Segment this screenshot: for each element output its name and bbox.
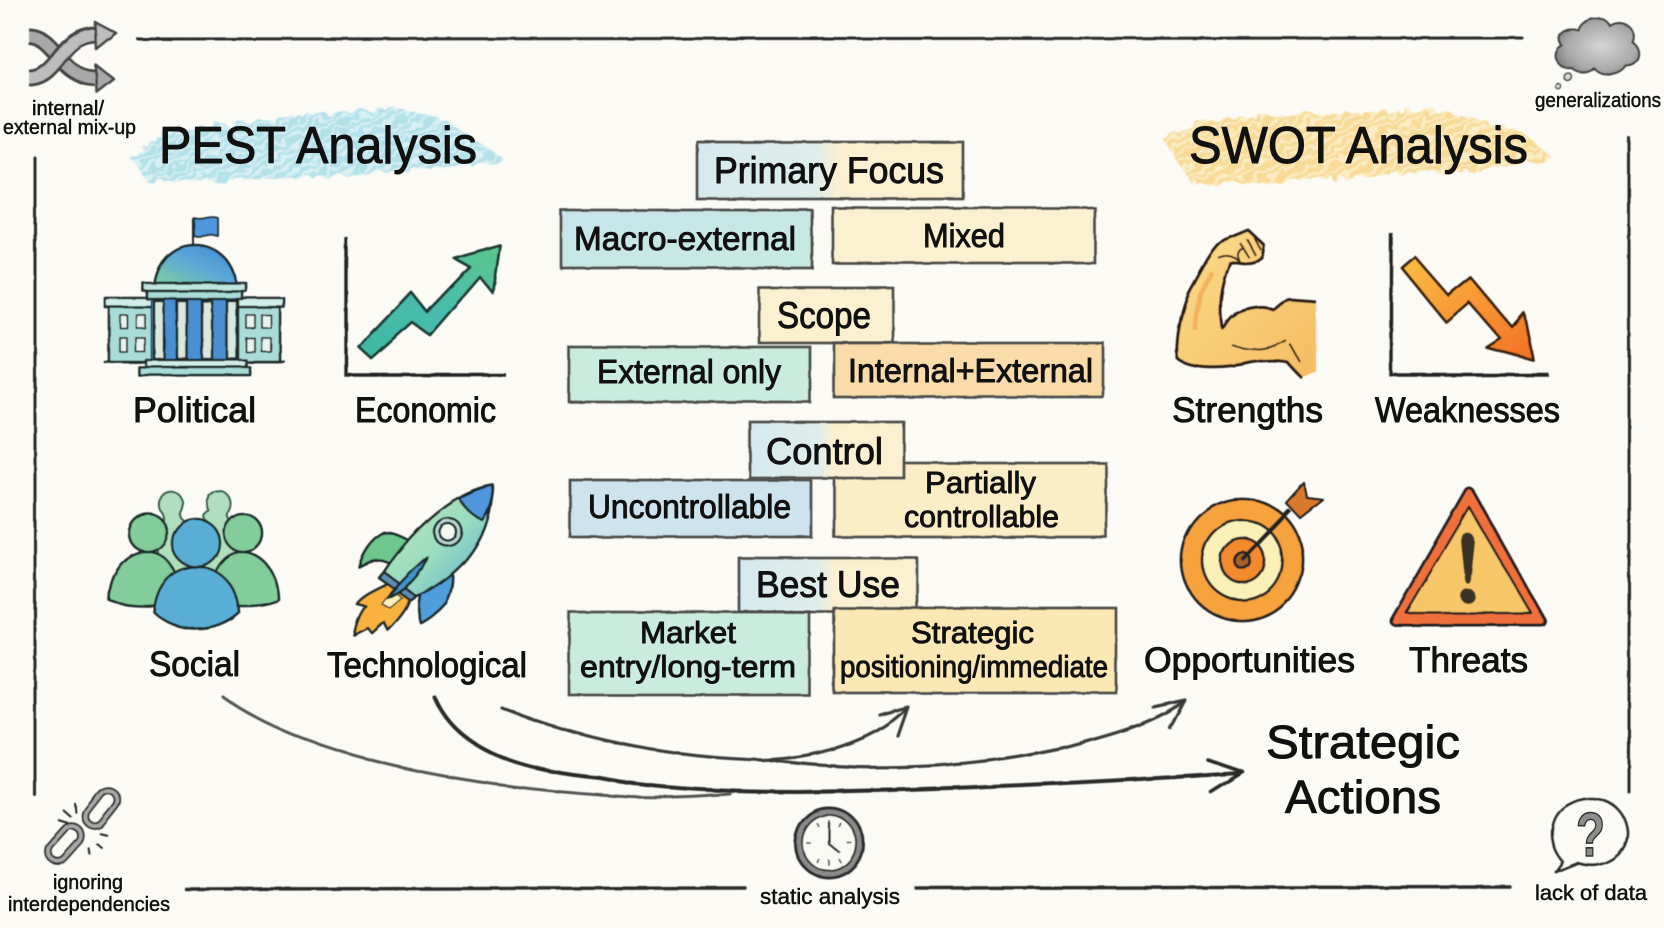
caption: internal/external mix-up: external mix-up (3, 117, 136, 139)
SWOT: Weaknesses (1375, 233, 1560, 430)
label: Strategic Actions: Actions (1285, 771, 1441, 823)
comparison row: Control (570, 422, 1106, 537)
box: Partially controllable: controllable (904, 499, 1059, 534)
caption: lack of data: lack of data (1535, 882, 1647, 905)
caption: static analysis: static analysis (760, 884, 900, 909)
arrow: PEST to Primary Focus boxes (502, 707, 908, 760)
caption: ignoring interdependencies (8, 872, 170, 916)
PEST: Economic (346, 237, 506, 430)
box: Macro-external (561, 210, 812, 268)
label: Weaknesses: Weaknesses (1375, 391, 1560, 430)
heading box: Scope (759, 288, 893, 343)
box: Market entry/long-term: Market (640, 615, 736, 650)
label: Economic: Economic (355, 391, 496, 430)
box: Strategic positioning/immediate (834, 608, 1116, 693)
comparison row: Best Use (569, 558, 1116, 695)
icon: capitol building (105, 217, 284, 375)
box: Strategic positioning/immediate: positioning/immediate (840, 649, 1108, 684)
box: Market entry/long-term (569, 612, 809, 695)
icon: rocket (354, 485, 493, 635)
icon: question bubble, lack of data (1552, 799, 1627, 872)
heading box: Best Use: Best Use (756, 564, 900, 605)
heading box: Primary Focus: Primary Focus (714, 150, 944, 191)
caption: ignoring interdependencies: ignoring (53, 872, 123, 894)
icon: target with arrow (1181, 483, 1323, 621)
heading: PEST Analysis: PEST Analysis (159, 117, 477, 175)
heading box: Scope: Scope (777, 295, 871, 336)
label: Social: Social (149, 645, 240, 684)
heading box: Control (750, 422, 904, 478)
heading box: Control: Control (766, 431, 883, 472)
heading box: Primary Focus (697, 142, 963, 199)
box: Market entry/long-term: entry/long-term (580, 649, 796, 684)
box: Uncontrollable (570, 480, 811, 537)
PEST: Political (105, 217, 284, 430)
icon: broken chain, ignoring interdependencies (44, 787, 121, 865)
arrow: Social to Strategic Actions (223, 697, 730, 797)
icon: clock, static analysis (795, 808, 863, 878)
icon: rising chart (346, 237, 506, 375)
icon: warning triangle (1395, 492, 1541, 621)
box: External only: External only (597, 353, 781, 390)
arrow: Technological to Strategic Actions (435, 698, 1243, 792)
heading: SWOT Analysis: SWOT Analysis (1189, 117, 1528, 175)
box: Internal+External (834, 343, 1103, 397)
box: Partially controllable (834, 463, 1106, 537)
icon: thought cloud, generalizations (1555, 18, 1639, 89)
box: Mixed (833, 208, 1095, 263)
caption: internal/external mix-up: internal/ (32, 98, 104, 120)
label: Political: Political (133, 391, 256, 430)
icon: question bubble, lack of data: ? (1576, 801, 1605, 870)
icon: falling chart (1391, 233, 1549, 375)
comparison row: Primary Focus (561, 142, 1095, 268)
label: Threats: Threats (1409, 641, 1528, 680)
box: Uncontrollable: Uncontrollable (588, 488, 791, 525)
PEST: Technological (327, 485, 527, 685)
caption: ignoring interdependencies: interdependencies (8, 894, 170, 916)
box: Mixed: Mixed (923, 217, 1005, 254)
box: External only (569, 347, 810, 402)
label: Strengths: Strengths (1172, 391, 1323, 430)
caption: internal/external mix-up (3, 98, 136, 139)
SWOT: Opportunities (1144, 483, 1355, 680)
box: Strategic positioning/immediate: Strategic (911, 615, 1034, 650)
heading box: Best Use (739, 558, 917, 612)
box: Macro-external: Macro-external (574, 220, 796, 257)
SWOT: Threats (1395, 492, 1541, 680)
label: Technological: Technological (327, 646, 527, 685)
SWOT: Strengths (1172, 230, 1323, 430)
box: Partially controllable: Partially (925, 465, 1036, 500)
label: Strategic Actions: Strategic (1266, 716, 1460, 768)
label: Strategic Actions (1266, 716, 1460, 823)
comparison row: Scope (569, 288, 1103, 402)
icon: crossed arrows, internal/external mix-up (29, 22, 116, 92)
arrow: PEST to Opportunities (770, 700, 1185, 767)
box: Internal+External: Internal+External (848, 352, 1093, 389)
label: Opportunities: Opportunities (1144, 641, 1355, 680)
icon: flexed arm (1177, 230, 1316, 378)
PEST: Social (109, 491, 279, 684)
icon: group of people (109, 491, 279, 628)
